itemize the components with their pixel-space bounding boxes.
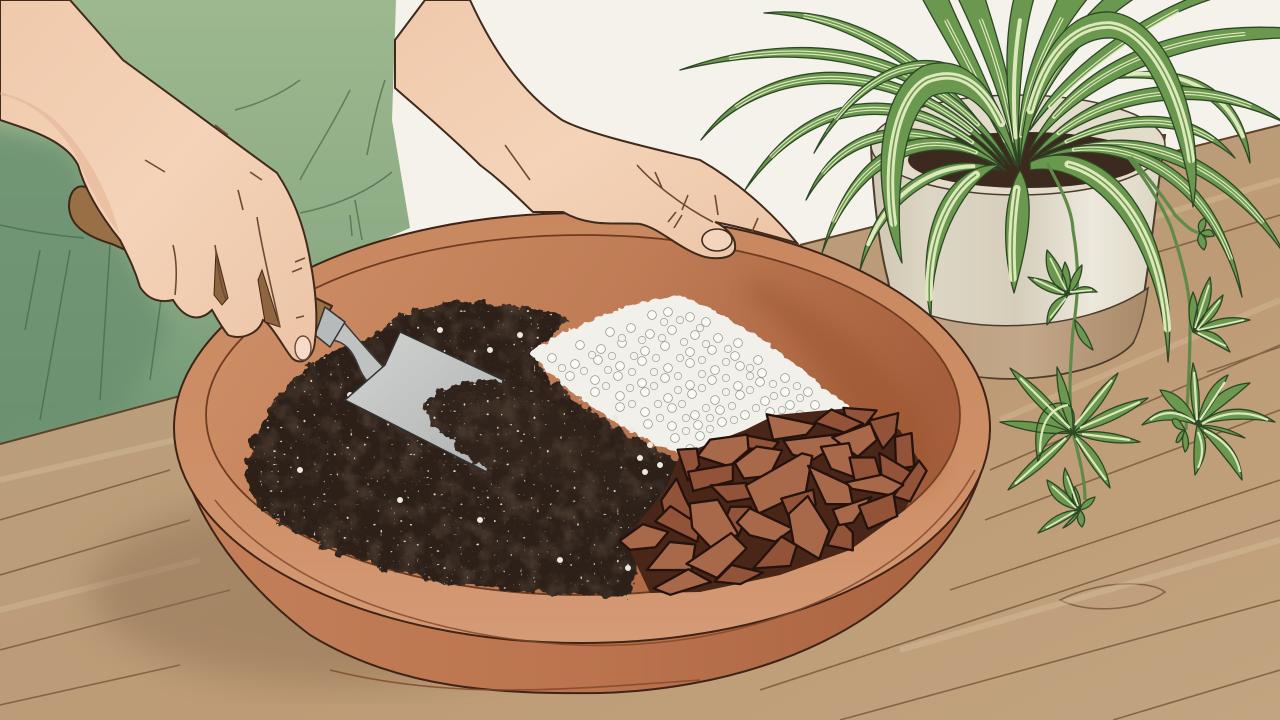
- spiderette: [1038, 468, 1095, 533]
- leaf: [764, 12, 1005, 160]
- bark shadow base: [625, 408, 925, 593]
- leaf: [745, 103, 1005, 190]
- big drooping leaf: [1030, 155, 1170, 362]
- bowl interior shading: [740, 280, 940, 491]
- leaf: [958, 0, 1018, 165]
- terracotta bowl: [174, 213, 990, 693]
- finger separations: [145, 125, 305, 327]
- leaf: [701, 72, 1005, 165]
- trowel neck: [332, 318, 408, 402]
- bowl cast shadow: [90, 495, 590, 685]
- dark potting soil: [246, 300, 690, 597]
- thumb and knuckle lines: [505, 145, 758, 232]
- pot rim: [871, 95, 1165, 195]
- spiderette: [1028, 250, 1097, 350]
- wood visible between fingers: [214, 250, 280, 327]
- thumbnail: [702, 229, 732, 251]
- leaf: [1020, 0, 1135, 150]
- spiderette: [1000, 367, 1148, 490]
- pot dipped base: [905, 288, 1148, 379]
- leaf: [822, 138, 1005, 253]
- apron seams and folds: [0, 80, 392, 420]
- leaf: [1035, 145, 1242, 297]
- big arching leaf: [1020, 12, 1196, 207]
- trowel blade: [345, 332, 503, 472]
- pot body: [871, 135, 1165, 379]
- perlite base: [530, 296, 850, 458]
- trowel handle: [69, 186, 332, 335]
- perlite granules: [552, 312, 815, 449]
- index fingernail: [295, 336, 311, 360]
- leaf: [1007, 0, 1034, 160]
- spider plant foliage: [680, 0, 1280, 362]
- pot soil: [908, 132, 1144, 188]
- plant pot: [871, 95, 1165, 379]
- leaf: [1030, 86, 1280, 160]
- wood grain: [0, 215, 1280, 720]
- bowl rim: [174, 213, 990, 643]
- leaf: [680, 48, 1010, 165]
- leaf: [1100, 71, 1250, 163]
- leaf: [1019, 0, 1088, 160]
- apron darker lower left wash: [0, 120, 170, 460]
- leaf: [922, 0, 1015, 165]
- leaf: [1030, 27, 1280, 150]
- big drooping leaf: [926, 165, 1000, 320]
- runner stems: [1047, 157, 1200, 500]
- hanging stems and baby spiderettes: [1000, 157, 1275, 533]
- wrist shading: [0, 92, 120, 235]
- perlite pile: [530, 296, 850, 458]
- leaf: [1040, 140, 1280, 255]
- leaf: [814, 61, 1015, 165]
- bowl outer wall: [178, 430, 990, 693]
- big arching leaf: [881, 63, 1018, 263]
- leaf: [1040, 116, 1235, 158]
- garden trowel: [69, 186, 640, 510]
- left arm and hand gripping the trowel: [0, 0, 316, 361]
- bark chips: [620, 408, 927, 595]
- soil on the trowel: [423, 381, 640, 510]
- trowel ferrule: [315, 307, 345, 347]
- green apron: [0, 0, 410, 460]
- spiderette: [1142, 363, 1275, 480]
- right arm and hand on the bowl rim: [395, 0, 797, 258]
- bowl interior: [206, 235, 960, 595]
- spiderette: [1189, 277, 1250, 352]
- centre front leaf: [1006, 170, 1029, 293]
- stray perlite in soil: [300, 330, 660, 568]
- leaf: [1030, 0, 1215, 130]
- spiderette: [1172, 218, 1214, 452]
- leaf: [860, 163, 1000, 270]
- leaf: [806, 129, 1005, 200]
